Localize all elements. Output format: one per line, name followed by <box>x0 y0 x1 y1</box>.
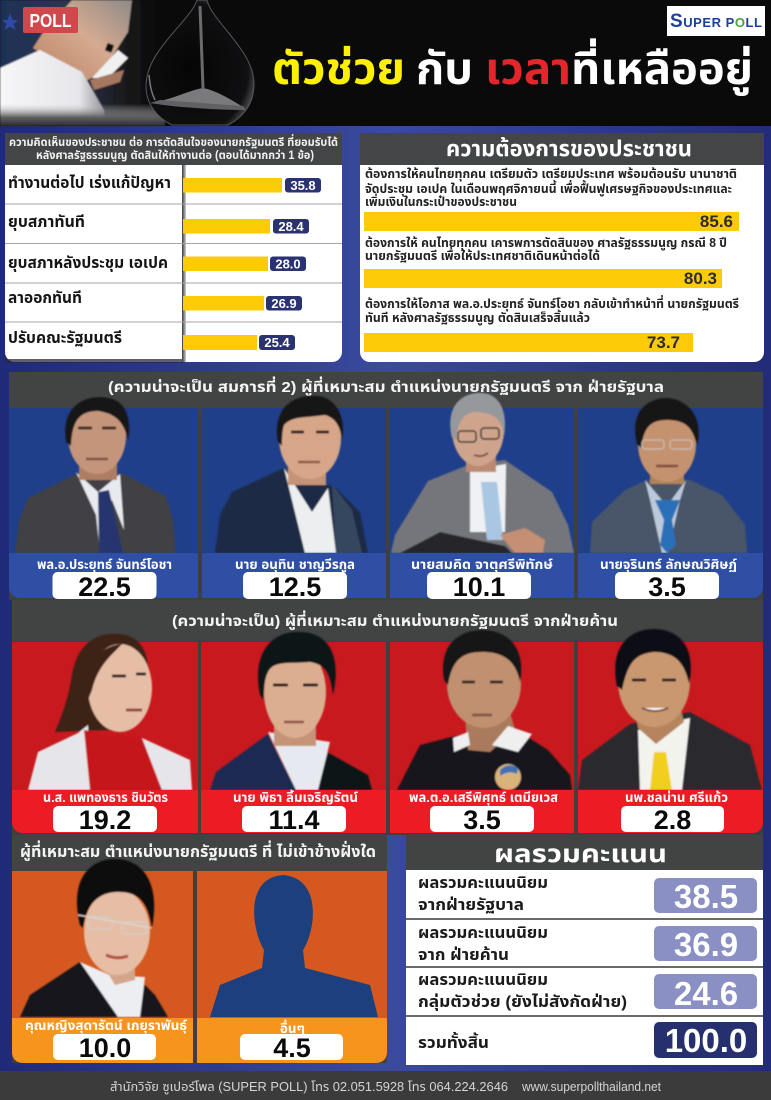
photo: hand and ballot paper <box>0 0 165 126</box>
card: Prayut 22.5: 22.5 <box>78 572 131 602</box>
section heading <box>12 600 763 641</box>
row: government total 38.5: ผลรวมคะแนนนิยม <box>418 875 548 892</box>
section: non-aligned candidates <box>12 835 387 1063</box>
row: reshuffle 25.4 <box>8 330 295 350</box>
card: Pita 11.4 <box>201 632 386 835</box>
row: reshuffle 25.4: ปรับคณะรัฐมนตรี <box>8 330 122 347</box>
row: reshuffle 25.4: 25.4 <box>264 335 290 350</box>
row: opposition total 36.9: จาก ฝ่ายค้าน <box>418 946 509 964</box>
title <box>272 38 753 96</box>
section: government candidates <box>9 372 763 602</box>
card: Paetongtarn 19.2 <box>12 634 198 835</box>
row: keep working 35.8 <box>8 174 321 193</box>
card: Jurin 3.5: นายจุรินทร์ ลักษณวิศิษฏ์ <box>600 557 737 572</box>
card: Anutin 12.5 <box>202 396 386 602</box>
row: helper group total 24.6: 24.6 <box>674 975 738 1012</box>
card: Paetongtarn 19.2: 19.2 <box>79 805 131 835</box>
item: APEC 85.6: จัดประชุม เอเปค ในเดือนพฤศจิกายนนี้ เพื่อฟื้นฟูเศรษฐกิจของประเทศและ <box>365 180 732 197</box>
panel heading: หลังศาลรัฐธรรมนูญ ตัดสินให้ทำงานต่อ (ตอบได้มากกว่า 1 ข้อ) <box>36 148 314 163</box>
card: Pita 11.4: นาย พิธา ลิ้มเจริญรัตน์ <box>233 789 358 805</box>
section heading: ผู้ที่เหมาะสม ตำแหน่งนายกรัฐมนตรี ที่ ไม่เข้าข้างฝั่งใด <box>20 840 376 862</box>
row: dissolve after APEC 28.0: ยุบสภาหลังประชุม เอเปค <box>8 255 168 272</box>
card: Somkid 10.1 <box>390 393 574 602</box>
section heading: (ความน่าจะเป็น สมการที่ 2) ผู้ที่เหมาะสม ตำแหน่งนายกรัฐมนตรี จาก ฝ่ายรัฐบาล <box>108 376 664 397</box>
portrait: Prayut <box>15 397 176 553</box>
title: เวลา <box>485 45 571 94</box>
row: government total 38.5 <box>418 875 757 915</box>
logo: super poll: SUPER POLL <box>670 11 762 32</box>
row: dissolve now 28.4 <box>8 214 309 234</box>
row: government total 38.5: จากฝ่ายรัฐบาล <box>418 896 524 914</box>
section heading <box>12 835 387 872</box>
item: APEC 85.6: ต้องการให้คนไทยทุกคน เตรียมตัว เตรียมประเทศ พร้อมต้อนรับ นานาชาติ <box>365 167 737 181</box>
row: dissolve now 28.4: 28.4 <box>278 219 304 234</box>
row: keep working 35.8: 35.8 <box>290 178 316 193</box>
poll badge <box>2 7 78 33</box>
row: opposition total 36.9: ผลรวมคะแนนนิยม <box>418 925 548 942</box>
card: Pita 11.4: 11.4 <box>268 805 320 835</box>
card: Sereepisuth 3.5: พล.ต.อ.เสรีพิศุทธ์ เตมียเวส <box>409 790 558 805</box>
icon: silhouette <box>210 875 378 1017</box>
header banner <box>0 0 771 126</box>
row: keep working 35.8: ทำงานต่อไป เร่งแก้ปัญหา <box>8 174 171 192</box>
row: helper group total 24.6: กลุ่มตัวช่วย (ยังไม่สังกัดฝ่าย) <box>418 993 627 1011</box>
panel heading <box>360 133 764 165</box>
card: others 4.5: อื่นๆ <box>280 1019 305 1036</box>
item: Prayut returns 73.7: ต้องการให้โอกาส พล.อ.ประยุทธ์ จันทร์โอชา กลับเข้าทำหน้าที่ นายกรัฐมนตรี <box>365 295 739 311</box>
card: Cholnan 2.8: 2.8 <box>654 805 691 835</box>
title: ที่เหลืออยู่ <box>571 38 753 96</box>
row: resign now 26.9 <box>8 290 302 311</box>
card: others 4.5: 4.5 <box>273 1033 311 1063</box>
panel heading: ความคิดเห็นของประชาชน ต่อ การตัดสินใจของนายกรัฐมนตรี ที่ยอมรับได้ <box>9 134 338 149</box>
title: กับ <box>416 45 473 94</box>
item: Prayut returns 73.7 <box>364 295 739 352</box>
panel: score totals <box>406 835 763 1065</box>
card: Prayut 22.5 <box>9 397 198 602</box>
item: respect ruling 80.3: ต้องการให้ คนไทยทุกคน เคารพการตัดสินของ ศาลรัฐธรรมนูญ กรณี 8 ปี <box>365 236 727 251</box>
panel: public opinion after court ruling <box>5 133 342 363</box>
card: Somkid 10.1: นายสมคิด จาตุศรีพิทักษ์ <box>411 557 553 572</box>
portrait: Sereepisuth <box>397 630 572 790</box>
item: respect ruling 80.3 <box>364 236 727 288</box>
portrait: Cholnan <box>578 629 762 790</box>
row: grand total 100.0 <box>418 1022 757 1059</box>
footer: www.superpollthailand.net <box>521 1080 661 1094</box>
logo: super poll <box>667 6 765 36</box>
panel heading <box>406 835 763 871</box>
row: grand total 100.0: 100.0 <box>665 1022 747 1059</box>
row: resign now 26.9: 26.9 <box>271 296 297 311</box>
item: Prayut returns 73.7: 73.7 <box>647 333 680 352</box>
row: opposition total 36.9: 36.9 <box>674 926 738 963</box>
footer: สำนักวิจัย ซูเปอร์โพล (SUPER POLL) โทร 02.051.5928 โทร 064.224.2646 <box>110 1080 508 1094</box>
card: Anutin 12.5: นาย อนุทิน ชาญวีรกูล <box>235 557 355 573</box>
item: Prayut returns 73.7: ทันที หลังศาลรัฐธรรมนูญ ตัดสินเสร็จสิ้นแล้ว <box>365 310 590 326</box>
card: Somkid 10.1: 10.1 <box>453 572 505 602</box>
item: respect ruling 80.3: นายกรัฐมนตรี เพื่อให้ประเทศชาติเดินหน้าต่อได้ <box>365 247 600 263</box>
card: Sereepisuth 3.5 <box>390 630 574 835</box>
item: APEC 85.6: เพิ่มเงินในกระเป๋าของประชาชน <box>365 194 517 209</box>
portrait: Anutin <box>215 396 368 553</box>
section: opposition candidates <box>12 600 763 835</box>
card: Cholnan 2.8 <box>578 629 763 835</box>
row: grand total 100.0: รวมทั้งสิ้น <box>418 1032 489 1052</box>
title: ตัวช่วย <box>272 45 405 94</box>
icon: hourglass drop <box>146 0 254 125</box>
row: helper group total 24.6 <box>418 972 757 1012</box>
card: others 4.5 <box>197 871 387 1063</box>
portrait: Jurin <box>590 398 747 553</box>
card: Anutin 12.5: 12.5 <box>269 572 321 602</box>
row: dissolve now 28.4: ยุบสภาทันที <box>8 214 85 231</box>
card: Sereepisuth 3.5: 3.5 <box>463 805 501 835</box>
item: respect ruling 80.3: 80.3 <box>684 269 717 288</box>
portrait: Somkid <box>391 393 574 553</box>
card: Cholnan 2.8: นพ.ชลน่าน ศรีแก้ว <box>625 790 728 805</box>
panel heading <box>5 133 342 165</box>
row: dissolve after APEC 28.0 <box>8 255 306 272</box>
row: helper group total 24.6: ผลรวมคะแนนนิยม <box>418 972 548 989</box>
footer <box>0 1071 771 1100</box>
panel: what people want <box>360 133 764 362</box>
portrait: Paetongtarn <box>28 634 192 790</box>
card: Sudarat 10.0 <box>12 859 193 1063</box>
card: Sudarat 10.0: 10.0 <box>79 1033 131 1063</box>
portrait: Sudarat <box>20 859 168 1017</box>
panel heading: ความต้องการของประชาชน <box>446 136 692 161</box>
row: dissolve after APEC 28.0: 28.0 <box>275 256 301 272</box>
poll badge: POLL <box>30 11 72 31</box>
card: Prayut 22.5: พล.อ.ประยุทธ์ จันทร์โอชา <box>37 557 172 572</box>
section heading: (ความน่าจะเป็น) ผู้ที่เหมาะสม ตำแหน่งนายกรัฐมนตรี จากฝ่ายค้าน <box>172 610 618 631</box>
card: Jurin 3.5: 3.5 <box>648 572 686 602</box>
row: resign now 26.9: ลาออกทันที <box>8 290 82 307</box>
portrait: Pita <box>210 632 372 790</box>
card: Sudarat 10.0: คุณหญิงสุดารัตน์ เกยุราพันธุ์ <box>25 1018 187 1033</box>
item: APEC 85.6 <box>364 167 739 231</box>
row: government total 38.5: 38.5 <box>674 878 738 915</box>
card: Paetongtarn 19.2: น.ส. แพทองธาร ชินวัตร <box>43 790 168 805</box>
section heading <box>9 372 763 409</box>
item: APEC 85.6: 85.6 <box>700 212 733 231</box>
panel heading: ผลรวมคะแนน <box>494 840 667 868</box>
row: opposition total 36.9 <box>418 925 757 964</box>
label bar <box>197 1018 387 1063</box>
card: Jurin 3.5 <box>578 398 763 602</box>
